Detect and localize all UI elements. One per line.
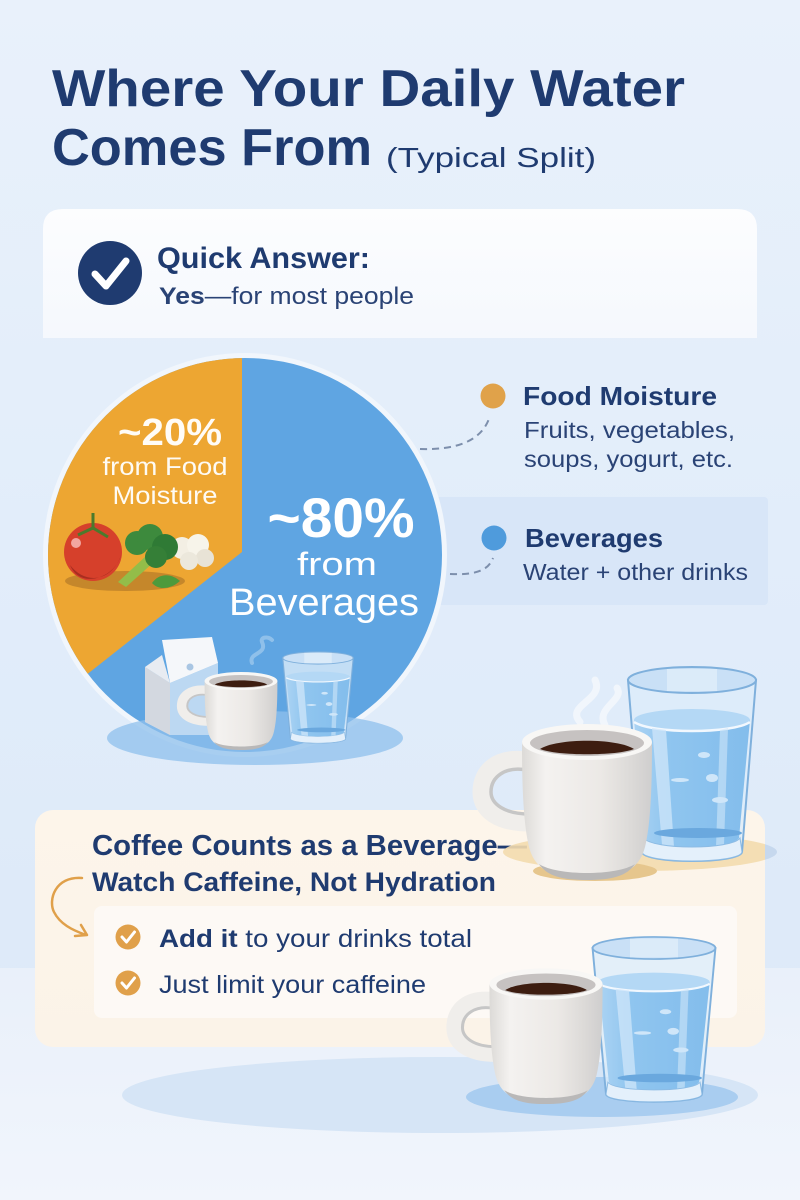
large coffee mug: [482, 724, 652, 880]
title: Where Your Daily Water: [52, 60, 685, 118]
legend: food moisture: Fruits, vegetables,: [524, 417, 735, 443]
icon: check badge: [78, 241, 142, 305]
legend: beverages: [482, 523, 748, 585]
food pie label: ~20%: [118, 412, 222, 454]
icon: milk carton: [145, 637, 218, 735]
icon: food group: [64, 513, 214, 591]
beverage pie label: from: [297, 546, 377, 582]
icon: small coffee mug: [182, 672, 277, 750]
illustration: lower coffee and glass: [455, 937, 738, 1117]
lower water glass: [593, 937, 715, 1102]
coffee heading: Coffee Counts as a Beverage—: [92, 830, 527, 862]
coffee heading: Watch Caffeine, Not Hydration: [92, 867, 496, 897]
icon: steam: [251, 638, 272, 663]
legend backing panel: beverages: [430, 497, 768, 605]
connector: beverages: [450, 558, 493, 574]
quick answer heading: Quick Answer:: [157, 242, 370, 275]
legend: food moisture: Food Moisture: [523, 381, 717, 411]
food pie label: Moisture: [112, 482, 218, 510]
pie slice: food moisture: [48, 358, 242, 674]
legend: food moisture: [480, 381, 735, 472]
panel: quick answer: [43, 209, 757, 338]
legend: beverages: Water + other drinks: [523, 559, 748, 585]
legend: food moisture: soups, yogurt, etc.: [524, 446, 733, 472]
quick answer text: Yes—for most people: [159, 283, 414, 310]
connector: food moisture: [420, 416, 490, 449]
check item: drinks total: Add it to your drinks total: [159, 925, 472, 953]
beverage pie label: Beverages: [229, 582, 419, 624]
illustration: large coffee and glass: [482, 667, 777, 881]
beverage pie label: [229, 486, 419, 624]
icon: small water glass: [283, 652, 353, 743]
large water glass: [628, 667, 756, 861]
panel: coffee: [35, 810, 765, 1047]
food pie label: from Food: [102, 453, 228, 481]
food pie label: [102, 412, 228, 510]
coffee heading: [92, 830, 527, 897]
checklist panel: [94, 906, 737, 1018]
floor shadow: [122, 1057, 758, 1133]
beverage pie label: ~80%: [268, 486, 414, 549]
drinks shadow: [107, 711, 403, 765]
lower coffee mug: [455, 968, 603, 1104]
title: [52, 60, 685, 177]
arrow: [52, 878, 87, 936]
title: Comes From: [52, 119, 372, 177]
pie chart: [43, 353, 447, 765]
table shadow outside panel: [503, 833, 777, 871]
check item: limit caffeine: Just limit your caffeine: [159, 971, 426, 999]
title: (Typical Split): [386, 142, 596, 173]
legend: beverages: Beverages: [525, 523, 663, 553]
